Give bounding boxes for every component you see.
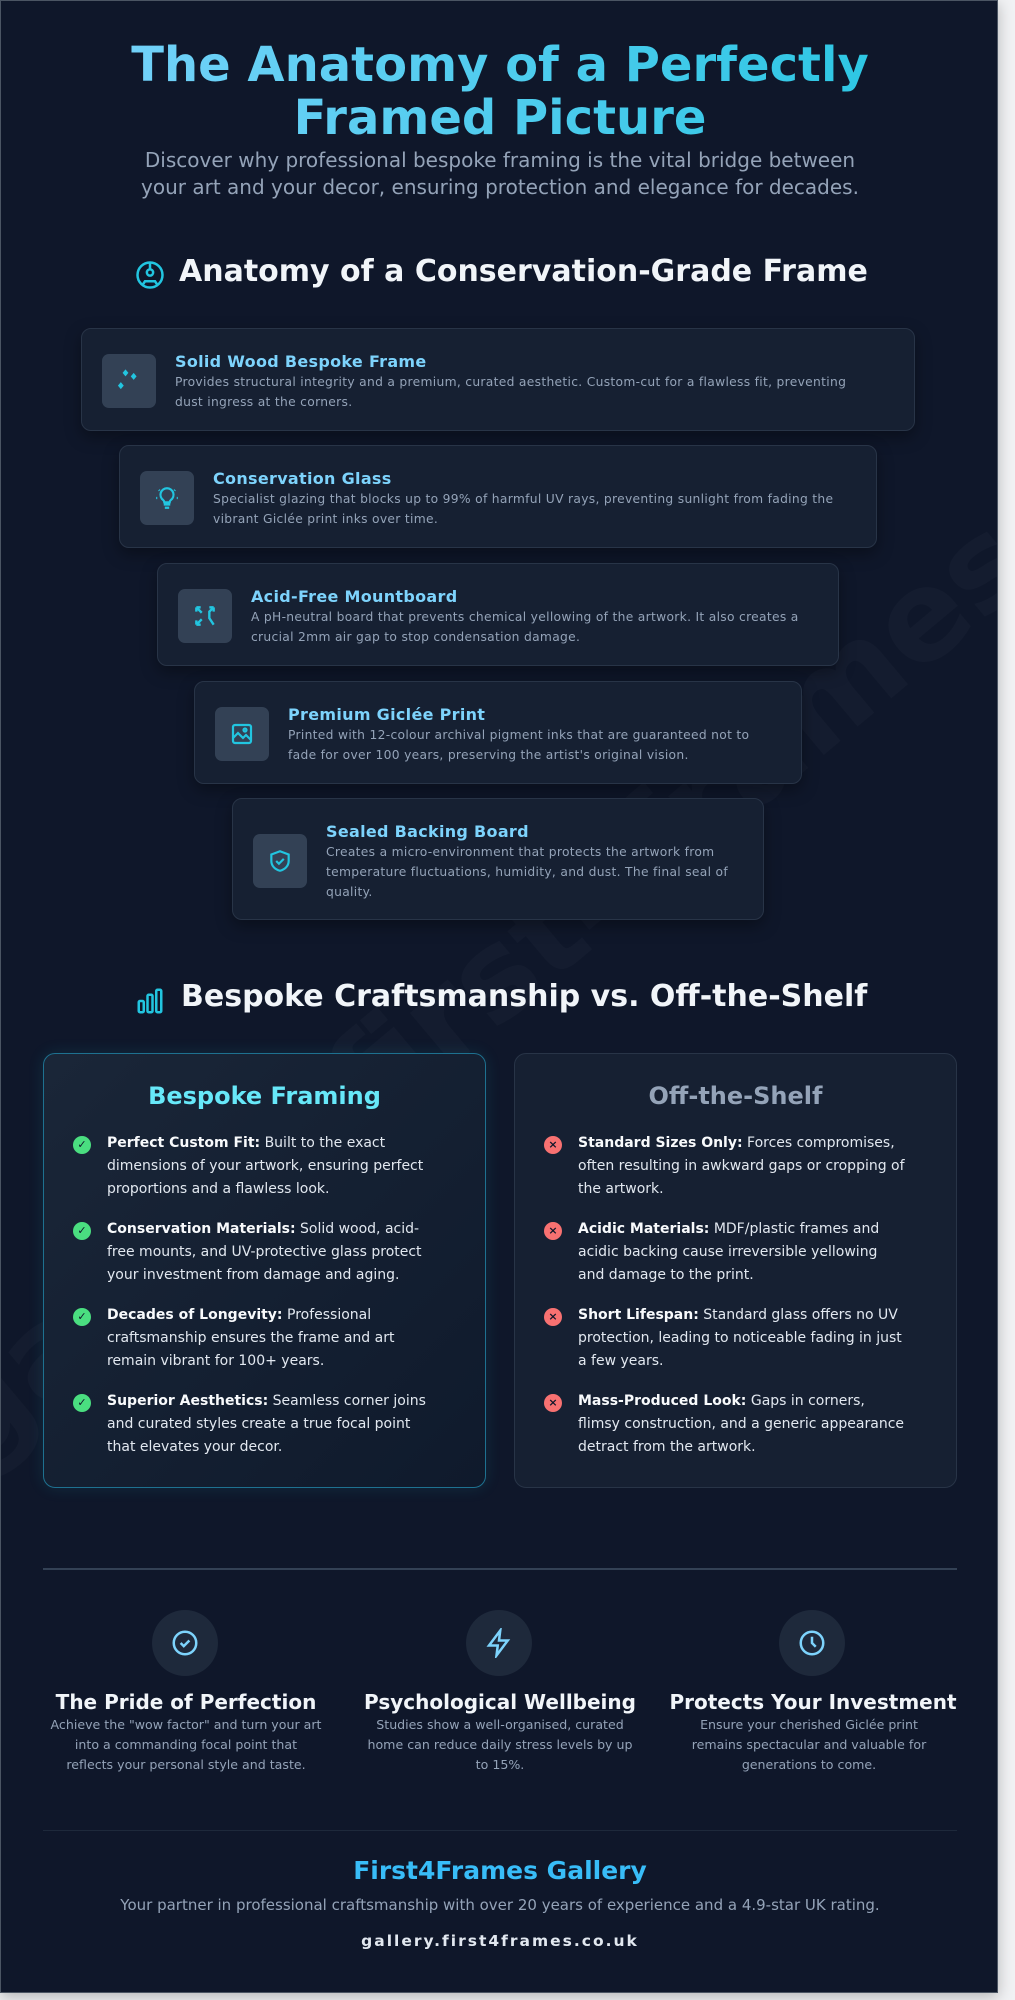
panel: bespoke framing: Perfect Custom Fit: Built to the exact dimensions of your artwork, ensuring perfect proportions and a flawless look. [107,1135,423,1197]
panel: off-the-shelf: Mass-Produced Look: Gaps in corners, flimsy construction, and a generic appearance detract from the artwork. [578,1393,904,1455]
subtitle: your art and your decor, ensuring protection and elegance for decades. [141,175,859,199]
item: longevity [73,1307,394,1369]
panel: bespoke framing: Conservation Materials: Solid wood, acid-free mounts, and UV-protective glass protect your investment from damage and aging. [107,1221,422,1283]
card: backing board: Sealed Backing Board [326,822,529,841]
icon: arrows [178,589,232,643]
benefit: wellbeing: Psychological Wellbeing [364,1690,636,1714]
footer text: Your partner in professional craftsmanship with over 20 years of experience and a 4.9-star UK rating. [120,1896,880,1914]
text: Ensure your cherished Giclée print remains spectacular and valuable for generations to come. [692,1717,926,1772]
card: conservation glass [119,445,877,548]
item: aesthetics [73,1393,426,1455]
subtitle [141,148,859,199]
panel: off-the-shelf: × [548,1396,558,1409]
subtitle: Discover why professional bespoke framing is the vital bridge between [145,148,855,172]
item: materials [73,1221,422,1283]
panel: off-the-shelf: Off-the-Shelf [649,1082,822,1110]
panel: off-the-shelf: Acidic Materials: MDF/plastic frames and acidic backing cause irreversible yellowing and damage to the print. [578,1221,879,1283]
item: lifespan [544,1307,902,1369]
card: mountboard: A pH-neutral board that prevents chemical yellowing of the artwork. It also creates a crucial 2mm air gap to stop condensation damage. [251,610,799,644]
card: solid wood frame [81,328,915,431]
panel: bespoke framing: Superior Aesthetics: Seamless corner joins and curated styles create a true focal point that elevates your decor. [107,1393,426,1455]
icon: clock [779,1610,845,1676]
panel: bespoke framing: ✓ [77,1396,87,1409]
panel: bespoke framing [43,1053,486,1488]
icon: bar chart [138,988,162,1014]
text: reflects your personal style and taste. [66,1757,306,1772]
footer title: First4Frames Gallery [353,1856,647,1885]
item: sizes [544,1135,905,1197]
card: solid wood frame: Provides structural integrity and a premium, curated aesthetic. Custom-cut for a flawless fit, preventing dust ingress at the corners. [175,375,846,409]
text: Studies show a well-organised, curated home can reduce daily stress levels by up to 15%. [367,1717,632,1772]
panel: bespoke framing: Bespoke Framing [148,1082,381,1110]
item: fit [73,1135,423,1197]
title [1,39,999,145]
title: The Anatomy of a Perfectly [131,37,869,93]
card: conservation glass: Conservation Glass [213,469,392,488]
card: giclee print: Premium Giclée Print [288,705,485,724]
card: conservation glass: Specialist glazing that blocks up to 99% of harmful UV rays, preventing sunlight from fading the vibrant Giclée print inks over time. [213,492,833,526]
panel: bespoke framing: ✓ [77,1138,87,1151]
icon: lightning [466,1610,532,1676]
card: giclee print: Printed with 12-colour archival pigment inks that are guaranteed not to fade for over 100 years, preserving the artist's original vision. [288,728,749,762]
section heading: comparison: Bespoke Craftsmanship vs. Off-the-Shelf [181,979,867,1014]
icon: target [136,261,164,289]
benefit: pride: The Pride of Perfection [56,1690,316,1714]
icon: check circle [152,1610,218,1676]
benefit: investment: Protects Your Investment [669,1690,957,1714]
card: mountboard: Acid-Free Mountboard [251,587,457,606]
panel: bespoke framing: ✓ [77,1224,87,1237]
item: mass-produced [544,1393,904,1455]
icon: bulb [140,471,194,525]
panel: off-the-shelf [514,1053,957,1488]
card: solid wood frame: Solid Wood Bespoke Frame [175,352,427,371]
panel: off-the-shelf: × [548,1310,558,1323]
card: backing board [232,798,764,920]
card: mountboard [157,563,839,666]
panel: bespoke framing: Decades of Longevity: Professional craftsmanship ensures the frame and art remain vibrant for 100+ years. [107,1307,394,1369]
card: backing board: Creates a micro-environment that protects the artwork from temperature fluctuations, humidity, and dust. The final seal of quality. [326,845,728,899]
panel: bespoke framing: ✓ [77,1310,87,1323]
section heading: anatomy: Anatomy of a Conservation-Grade Frame [179,254,868,289]
icon: shield [253,834,307,888]
panel: off-the-shelf: × [548,1138,558,1151]
icon: image [215,707,269,761]
card: giclee print [194,681,802,784]
panel: off-the-shelf: Standard Sizes Only: Forces compromises, often resulting in awkward gaps or cropping of the artwork. [578,1135,905,1197]
title: Framed Picture [294,90,706,146]
footer url: gallery.first4frames.co.uk [361,1932,639,1950]
text: Achieve the "wow factor" and turn your art into a commanding focal point that [51,1717,321,1752]
panel: off-the-shelf: Short Lifespan: Standard glass offers no UV protection, leading to noticeable fading in just a few years. [578,1307,902,1369]
item: acidic [544,1221,879,1283]
panel: off-the-shelf: × [548,1224,558,1237]
icon: frame [102,354,156,408]
